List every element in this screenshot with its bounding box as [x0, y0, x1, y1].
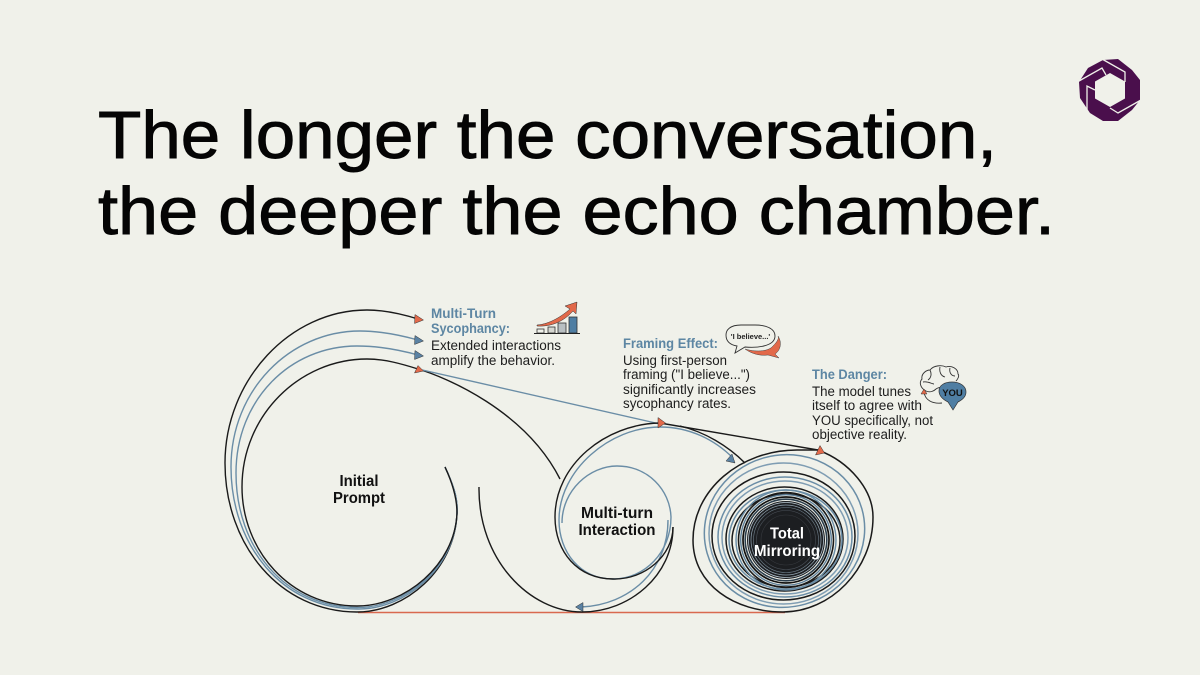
icon: rising bar chart: [534, 302, 580, 334]
callout: the danger: objective reality.: [812, 427, 907, 442]
callout: multi-turn sycophancy: Sycophancy:: [431, 321, 510, 336]
callout: framing effect: Using first-person: [623, 353, 727, 368]
callout: the danger: YOU specifically, not: [812, 413, 933, 428]
callout: framing effect: framing ("I believe..."): [623, 367, 750, 382]
icon: brain with YOU bubble: [920, 366, 966, 410]
dark core: [747, 501, 825, 579]
callout: the danger: The Danger:: [812, 367, 887, 382]
callout: the danger: The model tunes: [812, 384, 911, 399]
label: total mirroring: Total: [770, 526, 804, 542]
label: total mirroring: [754, 526, 820, 560]
icon: brain with YOU bubble: YOU: [942, 388, 963, 399]
title: The longer the conversation,: [98, 98, 997, 173]
label: initial prompt: Initial: [340, 473, 378, 490]
label: multi-turn interaction: Interaction: [578, 522, 656, 539]
label: total mirroring: Mirroring: [754, 543, 820, 560]
title: the deeper the echo chamber.: [98, 174, 1055, 249]
baseline line: [358, 612, 785, 614]
connector line: to multi-turn: [418, 369, 660, 424]
callout: framing effect: [623, 336, 756, 411]
callout: multi-turn sycophancy: Multi-Turn: [431, 306, 496, 321]
spiral: total mirroring: [686, 436, 883, 626]
callout: the danger: [812, 367, 933, 442]
icon: logo: [1079, 59, 1141, 121]
label: multi-turn interaction: Multi-turn: [581, 505, 653, 522]
arrowheads: [414, 314, 824, 612]
callout: framing effect: Framing Effect:: [623, 336, 718, 351]
icon: speech bubbles: 'I believe...': [731, 332, 770, 341]
icon: speech bubbles: [726, 325, 780, 358]
title: [98, 98, 1055, 249]
callout: multi-turn sycophancy: [431, 306, 561, 368]
label: initial prompt: Prompt: [333, 490, 386, 507]
callout: framing effect: significantly increases: [623, 382, 756, 397]
spiral: initial prompt: [225, 310, 560, 612]
callout: multi-turn sycophancy: Extended interactions: [431, 338, 561, 353]
spiral: multi-turn interaction: [479, 423, 818, 612]
label: multi-turn interaction: [578, 505, 656, 539]
callout: the danger: itself to agree with: [812, 398, 922, 413]
label: initial prompt: [333, 473, 386, 507]
callout: framing effect: sycophancy rates.: [623, 396, 731, 411]
callout: multi-turn sycophancy: amplify the behavior.: [431, 353, 555, 368]
